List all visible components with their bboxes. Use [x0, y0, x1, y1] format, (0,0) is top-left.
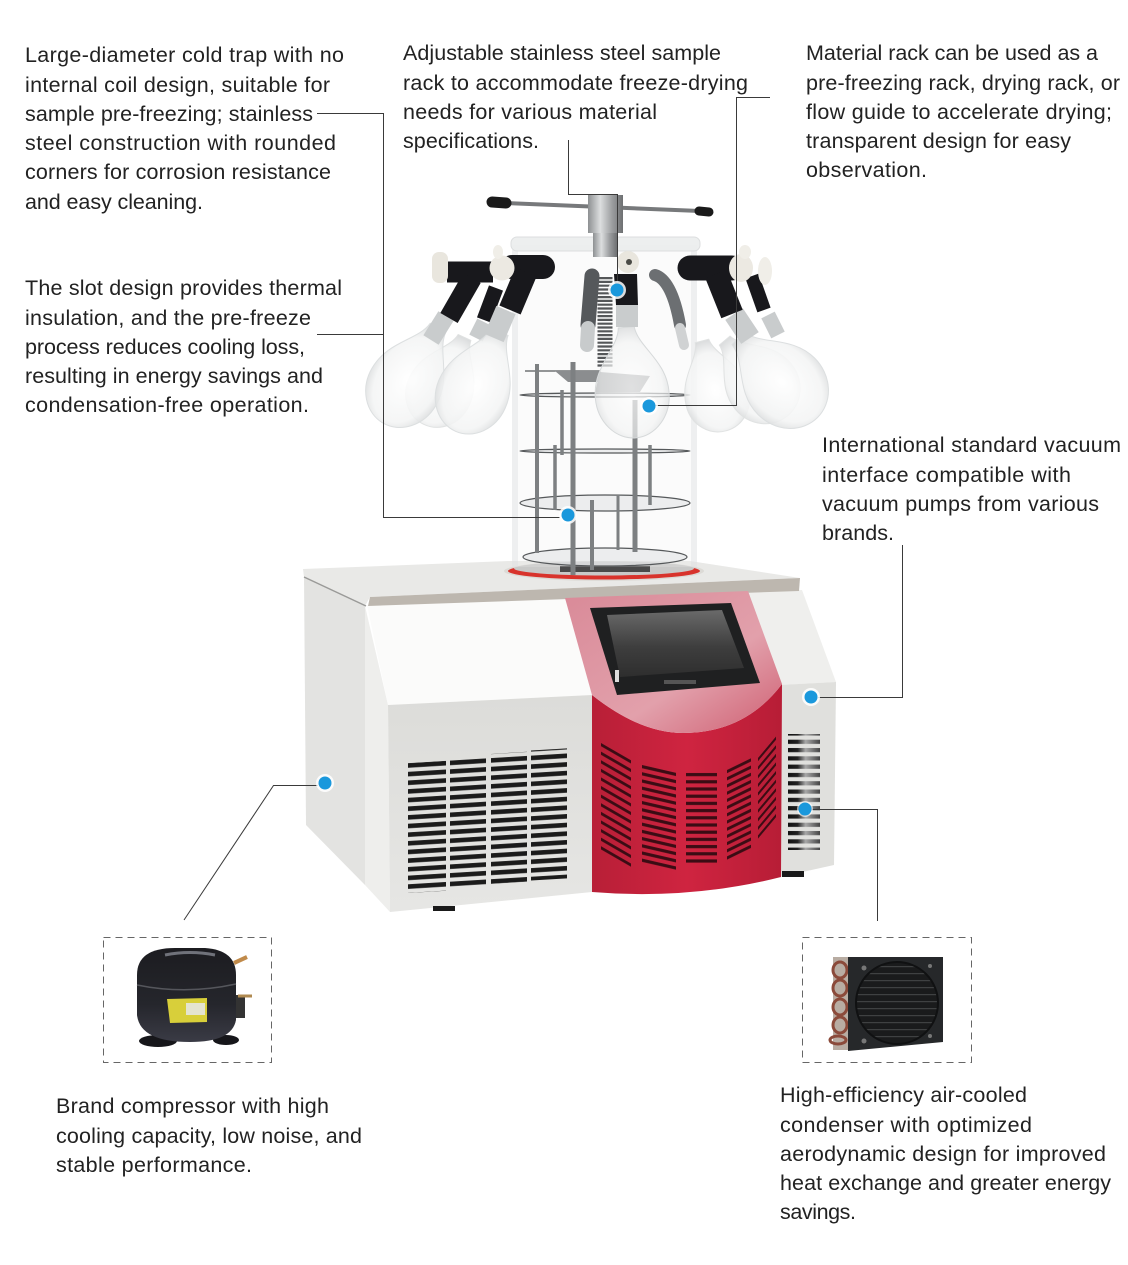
icon: compressor [137, 948, 252, 1047]
text: sample rack description: rack to accommodate freeze-drying [403, 71, 748, 95]
text: slot design description: condensation-free operation. [25, 393, 309, 417]
text: compressor description [56, 1094, 362, 1177]
leader lines [184, 98, 902, 921]
T handle [492, 195, 709, 257]
feet [433, 871, 804, 911]
top plate [303, 561, 800, 606]
text: vacuum interface description: brands. [822, 521, 894, 545]
text: material rack description: pre-freezing rack, drying rack, or [806, 71, 1120, 95]
text: condenser description: savings. [780, 1200, 856, 1224]
text: condenser description [780, 1083, 1111, 1224]
left inner flask [423, 245, 543, 446]
red control panel [565, 591, 782, 894]
text: cold trap description [25, 43, 344, 214]
text: slot design description: resulting in energy savings and [25, 364, 323, 388]
right outer flask [690, 245, 846, 446]
lower front grey panel [388, 695, 592, 912]
text: compressor description: Brand compressor with high [56, 1094, 329, 1118]
text: sample rack description: specifications. [403, 129, 539, 153]
front left fold [365, 606, 390, 912]
dashed frame [802, 938, 972, 1062]
text: compressor description: cooling capacity, low noise, and [56, 1124, 362, 1148]
text: cold trap description: internal coil design, suitable for [25, 73, 330, 97]
red panel vents [601, 736, 776, 872]
text: slot design description [25, 276, 342, 417]
touch screen [590, 603, 760, 695]
marker dot: condenser [797, 801, 813, 817]
marker dot: compressor [316, 774, 334, 792]
text: sample rack description: Adjustable stainless steel sample [403, 41, 721, 65]
marker dot: material rack [640, 397, 658, 415]
text: vacuum interface description: interface compatible with [822, 463, 1071, 487]
right side lower panel [780, 682, 836, 877]
text: condenser description: High-efficiency air-cooled [780, 1083, 1027, 1107]
front vent grille [408, 748, 567, 893]
text: material rack description: flow guide to accelerate drying; [806, 100, 1112, 124]
text: condenser description: heat exchange and greater energy [780, 1171, 1111, 1195]
marker dot: vacuum interface [802, 688, 820, 706]
freeze dryer base unit [303, 561, 836, 912]
text: slot design description: process reduces cooling loss, [25, 335, 305, 359]
condenser inset [802, 938, 972, 1062]
right side upper panel [748, 590, 836, 685]
text: sample rack description: needs for various material [403, 100, 657, 124]
acrylic cylinder [511, 237, 700, 567]
right vent grille [788, 734, 820, 850]
left side panel [304, 576, 365, 885]
text: cold trap description: steel construction with rounded [25, 131, 336, 155]
marker dot: sample rack [608, 281, 626, 299]
text: cold trap description: sample pre-freezing; stainless [25, 102, 313, 126]
text: condenser description: aerodynamic design for improved [780, 1142, 1106, 1166]
left outer flask [351, 252, 493, 442]
icon: condenser [830, 957, 943, 1051]
spring [598, 277, 612, 367]
text: cold trap description: and easy cleaning. [25, 190, 203, 214]
text: material rack description: transparent design for easy [806, 129, 1071, 153]
compressor inset [104, 938, 272, 1062]
text: sample rack description [403, 41, 748, 153]
dashed frame [104, 938, 272, 1062]
text: cold trap description: Large-diameter cold trap with no [25, 43, 344, 67]
text: cold trap description: corners for corrosion resistance [25, 160, 331, 184]
text: condenser description: condenser with optimized [780, 1113, 1032, 1137]
red seal ring [504, 561, 704, 581]
text: vacuum interface description [822, 433, 1121, 545]
text: vacuum interface description: vacuum pumps from various [822, 492, 1099, 516]
text: material rack description [806, 41, 1120, 182]
upper front white panel [367, 598, 592, 705]
center flask [589, 251, 673, 441]
text: compressor description: stable performance. [56, 1153, 252, 1177]
glass drying chamber [492, 195, 709, 581]
text: material rack description: Material rack can be used as a [806, 41, 1098, 65]
text: material rack description: observation. [806, 158, 927, 182]
text: slot design description: insulation, and the pre-freeze [25, 306, 311, 330]
rear glass flasks [394, 257, 815, 439]
text: vacuum interface description: International standard vacuum [822, 433, 1121, 457]
rear grey arms [587, 275, 684, 345]
sample rack [520, 362, 690, 575]
marker dot: cold trap [559, 506, 577, 524]
text: slot design description: The slot design provides thermal [25, 276, 342, 300]
